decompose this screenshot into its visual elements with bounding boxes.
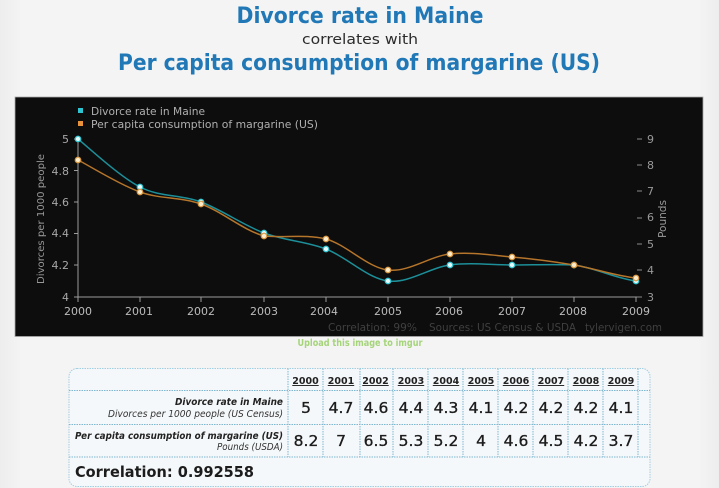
table header years: 2000 [292,376,319,387]
row values: divorce rate: 4.2 [504,399,528,417]
legend: Divorce rate in Maine [91,106,205,118]
left axis [36,133,637,304]
x axis years: 2001 [125,305,153,318]
row values: divorce rate: 4.2 [574,399,598,417]
row values: divorce rate: 4.7 [329,399,353,417]
heading: Divorce rate in Maine: Divorce rate in Maine [236,4,484,29]
heading: Per capita consumption of margarine (US): Per capita consumption of margarine (US) [118,51,600,76]
row values: margarine consumption: 4.6 [504,432,528,450]
row values: margarine consumption: 3.7 [609,432,633,450]
row values: margarine consumption: 4.2 [574,432,598,450]
chart credits: Sources: US Census & USDA [429,322,577,334]
right axis: 7 [647,185,654,198]
right axis [637,133,669,304]
line: divorce rate [78,139,636,281]
row values: divorce rate: 4.1 [469,399,493,417]
left axis: 4.6 [52,196,69,209]
right axis: Pounds [657,200,669,238]
table header years: 2002 [362,376,389,387]
left axis: 4 [62,291,69,304]
right axis: 9 [647,133,654,146]
x axis years [64,297,650,318]
data points: margarine consumption [75,157,639,281]
row label: divorce rate: Divorces per 1000 people (US Census) [108,409,283,420]
data table [69,368,650,486]
left axis: 5 [62,133,69,146]
chart credits: tylervigen.com [585,322,662,334]
row values: margarine consumption: 7 [336,432,346,450]
title [118,4,600,76]
row values: margarine consumption: 5.2 [434,432,458,450]
row values: divorce rate: 5 [301,399,311,417]
right axis: 4 [647,264,654,277]
table header years: 2006 [503,376,530,387]
left axis: 4.8 [52,165,69,178]
x axis years: 2008 [559,305,587,318]
row label: margarine consumption [75,431,283,453]
x axis years: 2006 [435,305,463,318]
table header years [292,376,634,387]
row values: margarine consumption: 4 [476,432,486,450]
table header years: 2009 [608,376,634,387]
correlation value: Correlation: 0.992558 [75,463,254,481]
right axis: 5 [647,238,654,251]
row values: margarine consumption [294,432,633,450]
data points: divorce rate [75,136,639,284]
line: margarine consumption [78,160,636,278]
panel: line chart [15,97,703,336]
row values: margarine consumption: 5.3 [399,432,423,450]
row label: margarine consumption: Per capita consumption of margarine (US) [75,431,283,442]
chart credits [328,322,662,334]
table header years: 2003 [398,376,424,387]
x axis years: 2003 [250,305,278,318]
text: correlates with: correlates with [302,32,418,48]
x axis years: 2005 [374,305,402,318]
right axis: 8 [647,159,654,172]
legend: Per capita consumption of margarine (US) [91,119,318,131]
row values: margarine consumption: 6.5 [364,432,388,450]
left axis: Divorces per 1000 people [36,154,47,284]
table header years: 2001 [328,376,354,387]
row values: divorce rate: 4.3 [434,399,458,417]
left axis: 4.4 [52,227,69,240]
table header years: 2007 [538,376,564,387]
x axis years: 2002 [187,305,215,318]
table header years: 2005 [468,376,494,387]
link: upload this image: Upload this image to imgur [298,338,423,349]
row values: divorce rate [301,399,633,417]
table header years: 2008 [573,376,600,387]
row label: margarine consumption: Pounds (USDA) [217,442,283,453]
row values: divorce rate: 4.6 [364,399,388,417]
x axis years: 2007 [498,305,526,318]
x axis years: 2009 [622,305,650,318]
table header years: 2004 [433,376,460,387]
row label: divorce rate [108,397,284,420]
x axis years: 2000 [64,305,92,318]
left axis: 4.2 [52,259,69,272]
row values: divorce rate: 4.1 [609,399,633,417]
row values: margarine consumption: 4.5 [539,432,563,450]
legend [78,106,318,131]
row label: divorce rate: Divorce rate in Maine [175,397,284,408]
chart credits: Correlation: 99% [328,322,417,334]
row values: divorce rate: 4.4 [399,399,423,417]
right axis: 6 [647,211,654,224]
right axis: 3 [647,291,654,304]
row values: divorce rate: 4.2 [539,399,563,417]
x axis years: 2004 [310,305,338,318]
row values: margarine consumption: 8.2 [294,432,318,450]
